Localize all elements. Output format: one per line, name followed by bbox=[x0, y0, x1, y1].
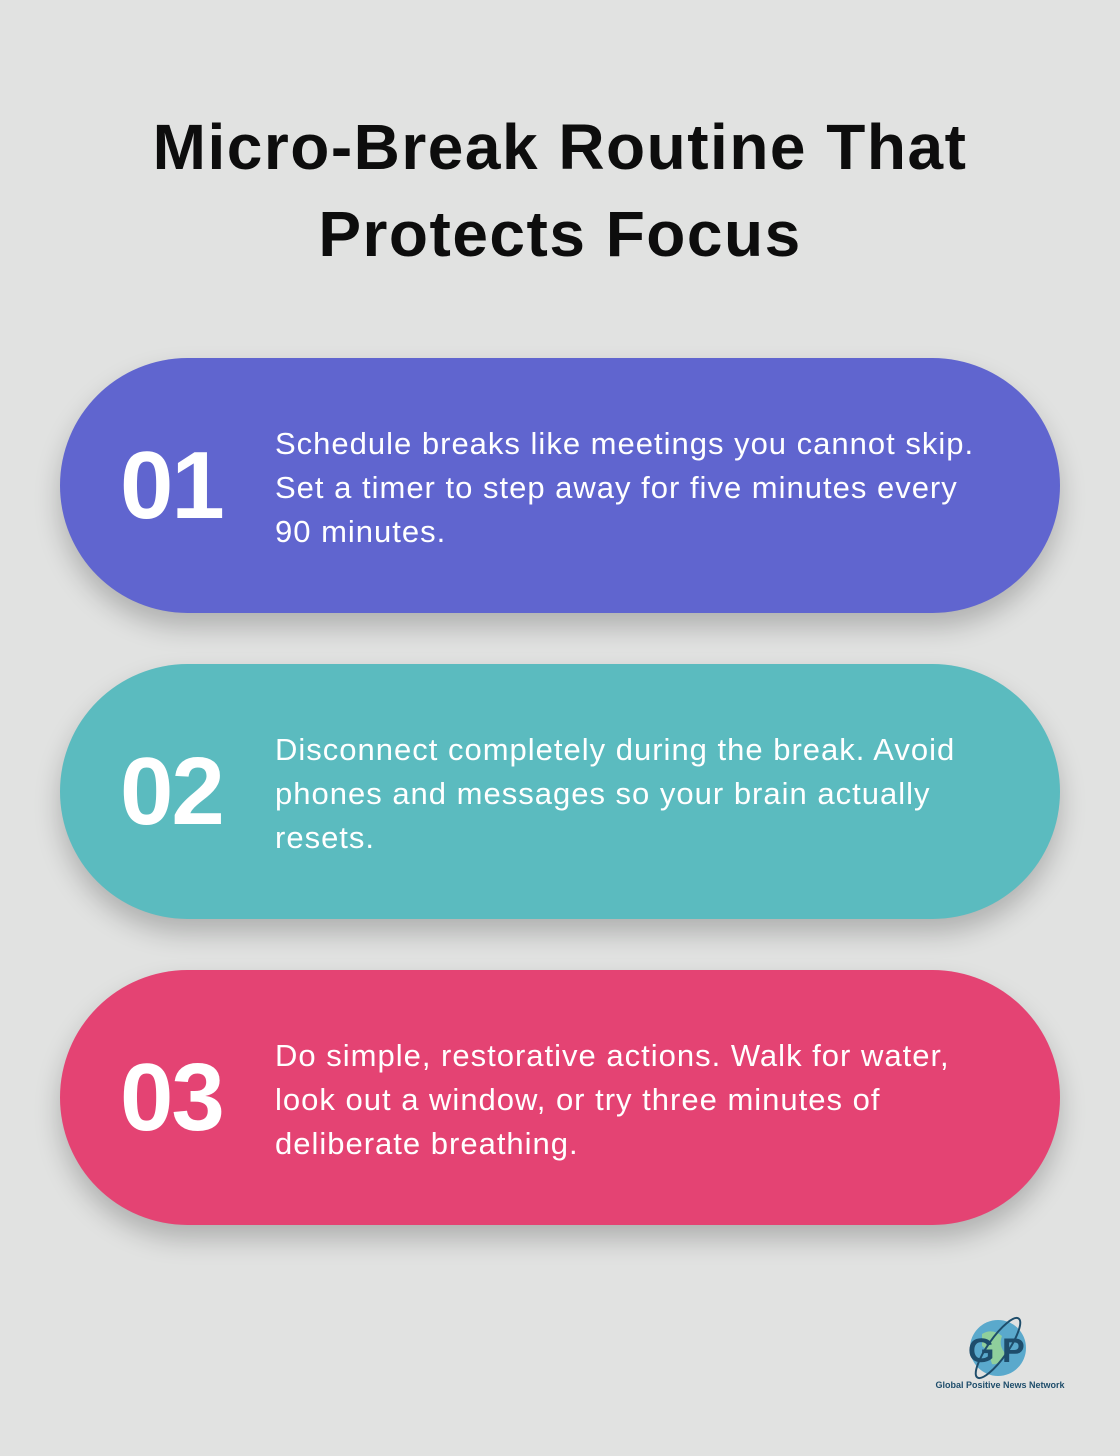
title bbox=[153, 111, 967, 270]
text 03: look out a window, or try three minutes of bbox=[275, 1082, 880, 1117]
logo: Global Positive News Network bbox=[935, 1380, 1066, 1390]
text 03: Do simple, restorative actions. Walk for water, bbox=[275, 1038, 950, 1073]
title: Micro-Break Routine That bbox=[153, 111, 967, 183]
panel: step 02 bbox=[60, 664, 1060, 919]
text 01 bbox=[275, 426, 974, 549]
number 02: 02 bbox=[120, 738, 223, 845]
text 03 bbox=[275, 1038, 950, 1161]
logo bbox=[935, 1316, 1066, 1390]
text 01: 90 minutes. bbox=[275, 514, 446, 549]
number 03: 03 bbox=[120, 1044, 223, 1151]
text 03: deliberate breathing. bbox=[275, 1126, 579, 1161]
panel: step 01 bbox=[60, 358, 1060, 613]
text 01: Set a timer to step away for five minutes every bbox=[275, 470, 958, 505]
number 01: 01 bbox=[120, 432, 223, 539]
text 02: resets. bbox=[275, 820, 375, 855]
logo: P bbox=[1002, 1332, 1025, 1370]
text 01: Schedule breaks like meetings you cannot skip. bbox=[275, 426, 974, 461]
text 02: Disconnect completely during the break. Avoid bbox=[275, 732, 955, 767]
logo: G bbox=[968, 1332, 994, 1370]
title: Protects Focus bbox=[318, 198, 802, 270]
text 02: phones and messages so your brain actually bbox=[275, 776, 930, 811]
text 02 bbox=[275, 732, 955, 855]
panel: step 03 bbox=[60, 970, 1060, 1225]
